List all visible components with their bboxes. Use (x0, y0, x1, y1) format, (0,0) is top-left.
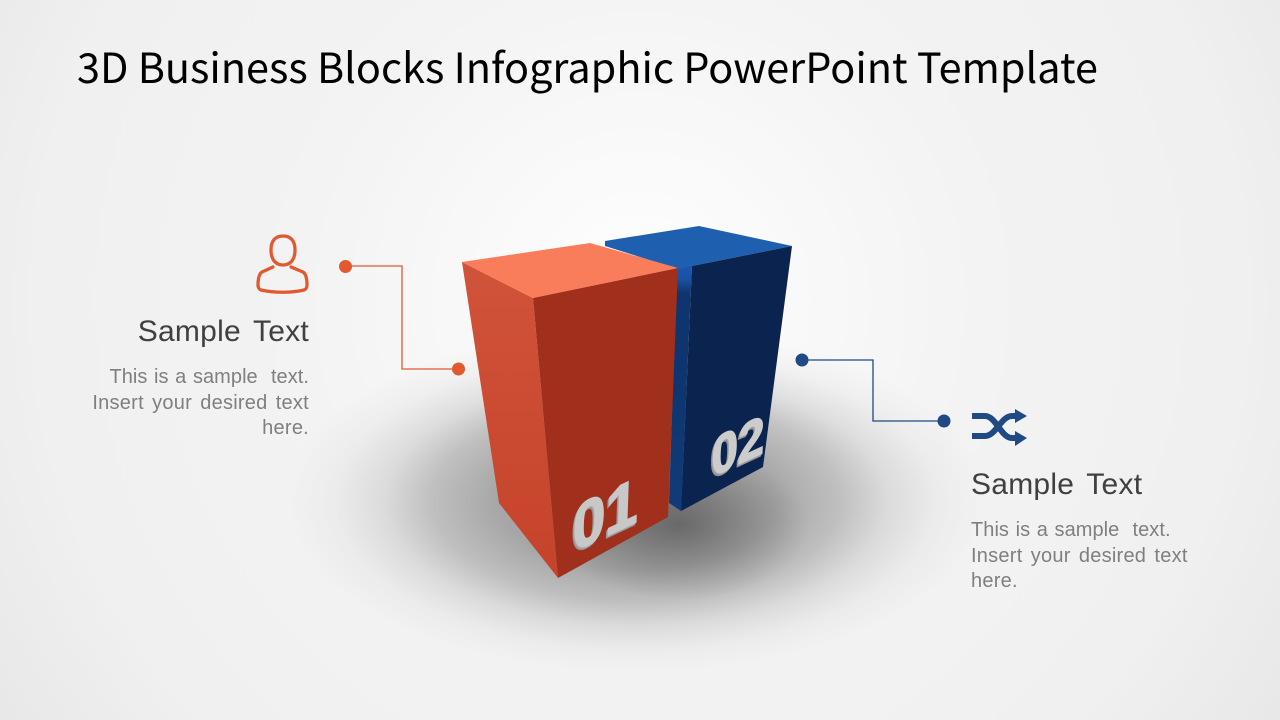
left text block: This is a sample text. (109, 366, 309, 388)
right text block: here. (971, 570, 1018, 592)
left text block: here. (262, 417, 309, 439)
icon: person (258, 236, 307, 292)
right text block: This is a sample text. (971, 519, 1171, 541)
icon: shuffle arrows (972, 409, 1027, 446)
right text block: Insert your desired text (971, 544, 1188, 566)
right text block (971, 519, 1188, 592)
connector: blue (796, 354, 950, 428)
ground shadow (286, 325, 986, 675)
left text block (92, 366, 309, 439)
title: 3D Business Blocks Infographic PowerPoint Template (77, 35, 1098, 95)
number 02: 02 (710, 405, 765, 491)
left text block: Insert your desired text (92, 392, 309, 414)
number 01: 01 (570, 465, 638, 569)
block 02: blue (605, 226, 792, 511)
block 01: red (462, 243, 678, 578)
connector: orange (339, 260, 465, 376)
number 01: 01 (571, 464, 639, 567)
number 02: 02 (711, 403, 766, 489)
number 02: 02 (709, 406, 764, 492)
right heading: Sample Text (971, 468, 1142, 501)
left heading: Sample Text (138, 315, 309, 348)
number 01: 01 (572, 462, 640, 566)
